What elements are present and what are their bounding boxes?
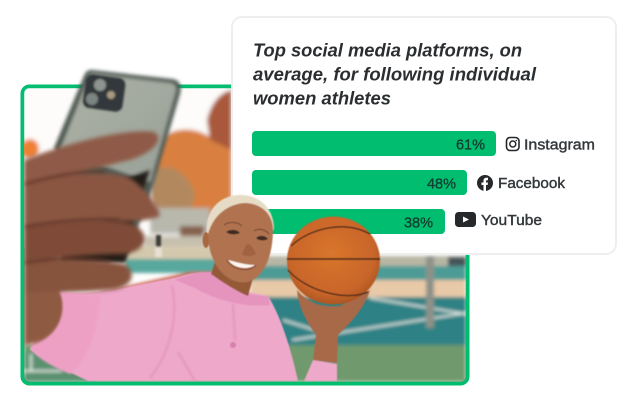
basketball bbox=[287, 216, 380, 304]
hoodie sleeve and torso bbox=[30, 272, 298, 381]
court surface bbox=[24, 246, 466, 382]
label: YouTube bbox=[455, 212, 542, 229]
heading bbox=[253, 40, 537, 108]
right sleeve cuff bbox=[304, 360, 337, 381]
phone bbox=[54, 70, 181, 262]
face bbox=[208, 203, 273, 282]
bar: YouTube 38% bbox=[252, 209, 445, 234]
sleeve cuff bbox=[29, 290, 78, 376]
label: YouTube: YouTube bbox=[481, 213, 542, 229]
heading: Top social media platforms, on bbox=[253, 40, 522, 60]
heading: average, for following individual bbox=[253, 64, 537, 84]
dark phone bottom bbox=[60, 170, 150, 262]
eyes bbox=[224, 222, 269, 240]
neck bbox=[211, 262, 254, 296]
hair bbox=[207, 195, 274, 240]
bar: Facebook 48%: 48% bbox=[427, 176, 456, 192]
photo foreground: woman in pink hoodie bbox=[30, 195, 380, 381]
bar: Instagram 61% bbox=[252, 131, 496, 156]
bar: YouTube 38%: 38% bbox=[404, 216, 433, 232]
blurred phone and hand in foreground bbox=[24, 70, 181, 374]
label: Instagram: Instagram bbox=[524, 138, 595, 154]
label: Facebook bbox=[477, 175, 566, 192]
small figure in the distance bbox=[155, 235, 162, 257]
bar: Facebook 48% bbox=[252, 170, 467, 195]
camera module bbox=[82, 73, 126, 113]
finger gaps bbox=[25, 172, 120, 263]
fingers bbox=[24, 131, 160, 346]
ear bbox=[202, 232, 210, 248]
label: Facebook: Facebook bbox=[498, 176, 566, 192]
photo frame with court scene bbox=[21, 86, 468, 384]
bar: Instagram 61%: 61% bbox=[456, 138, 485, 154]
hand base bbox=[24, 131, 160, 374]
panel: chart card bbox=[232, 17, 616, 254]
hand holding the ball bbox=[297, 290, 370, 363]
trees and sky bbox=[24, 88, 231, 250]
heading: women athletes bbox=[253, 88, 391, 108]
smile bbox=[228, 260, 255, 268]
